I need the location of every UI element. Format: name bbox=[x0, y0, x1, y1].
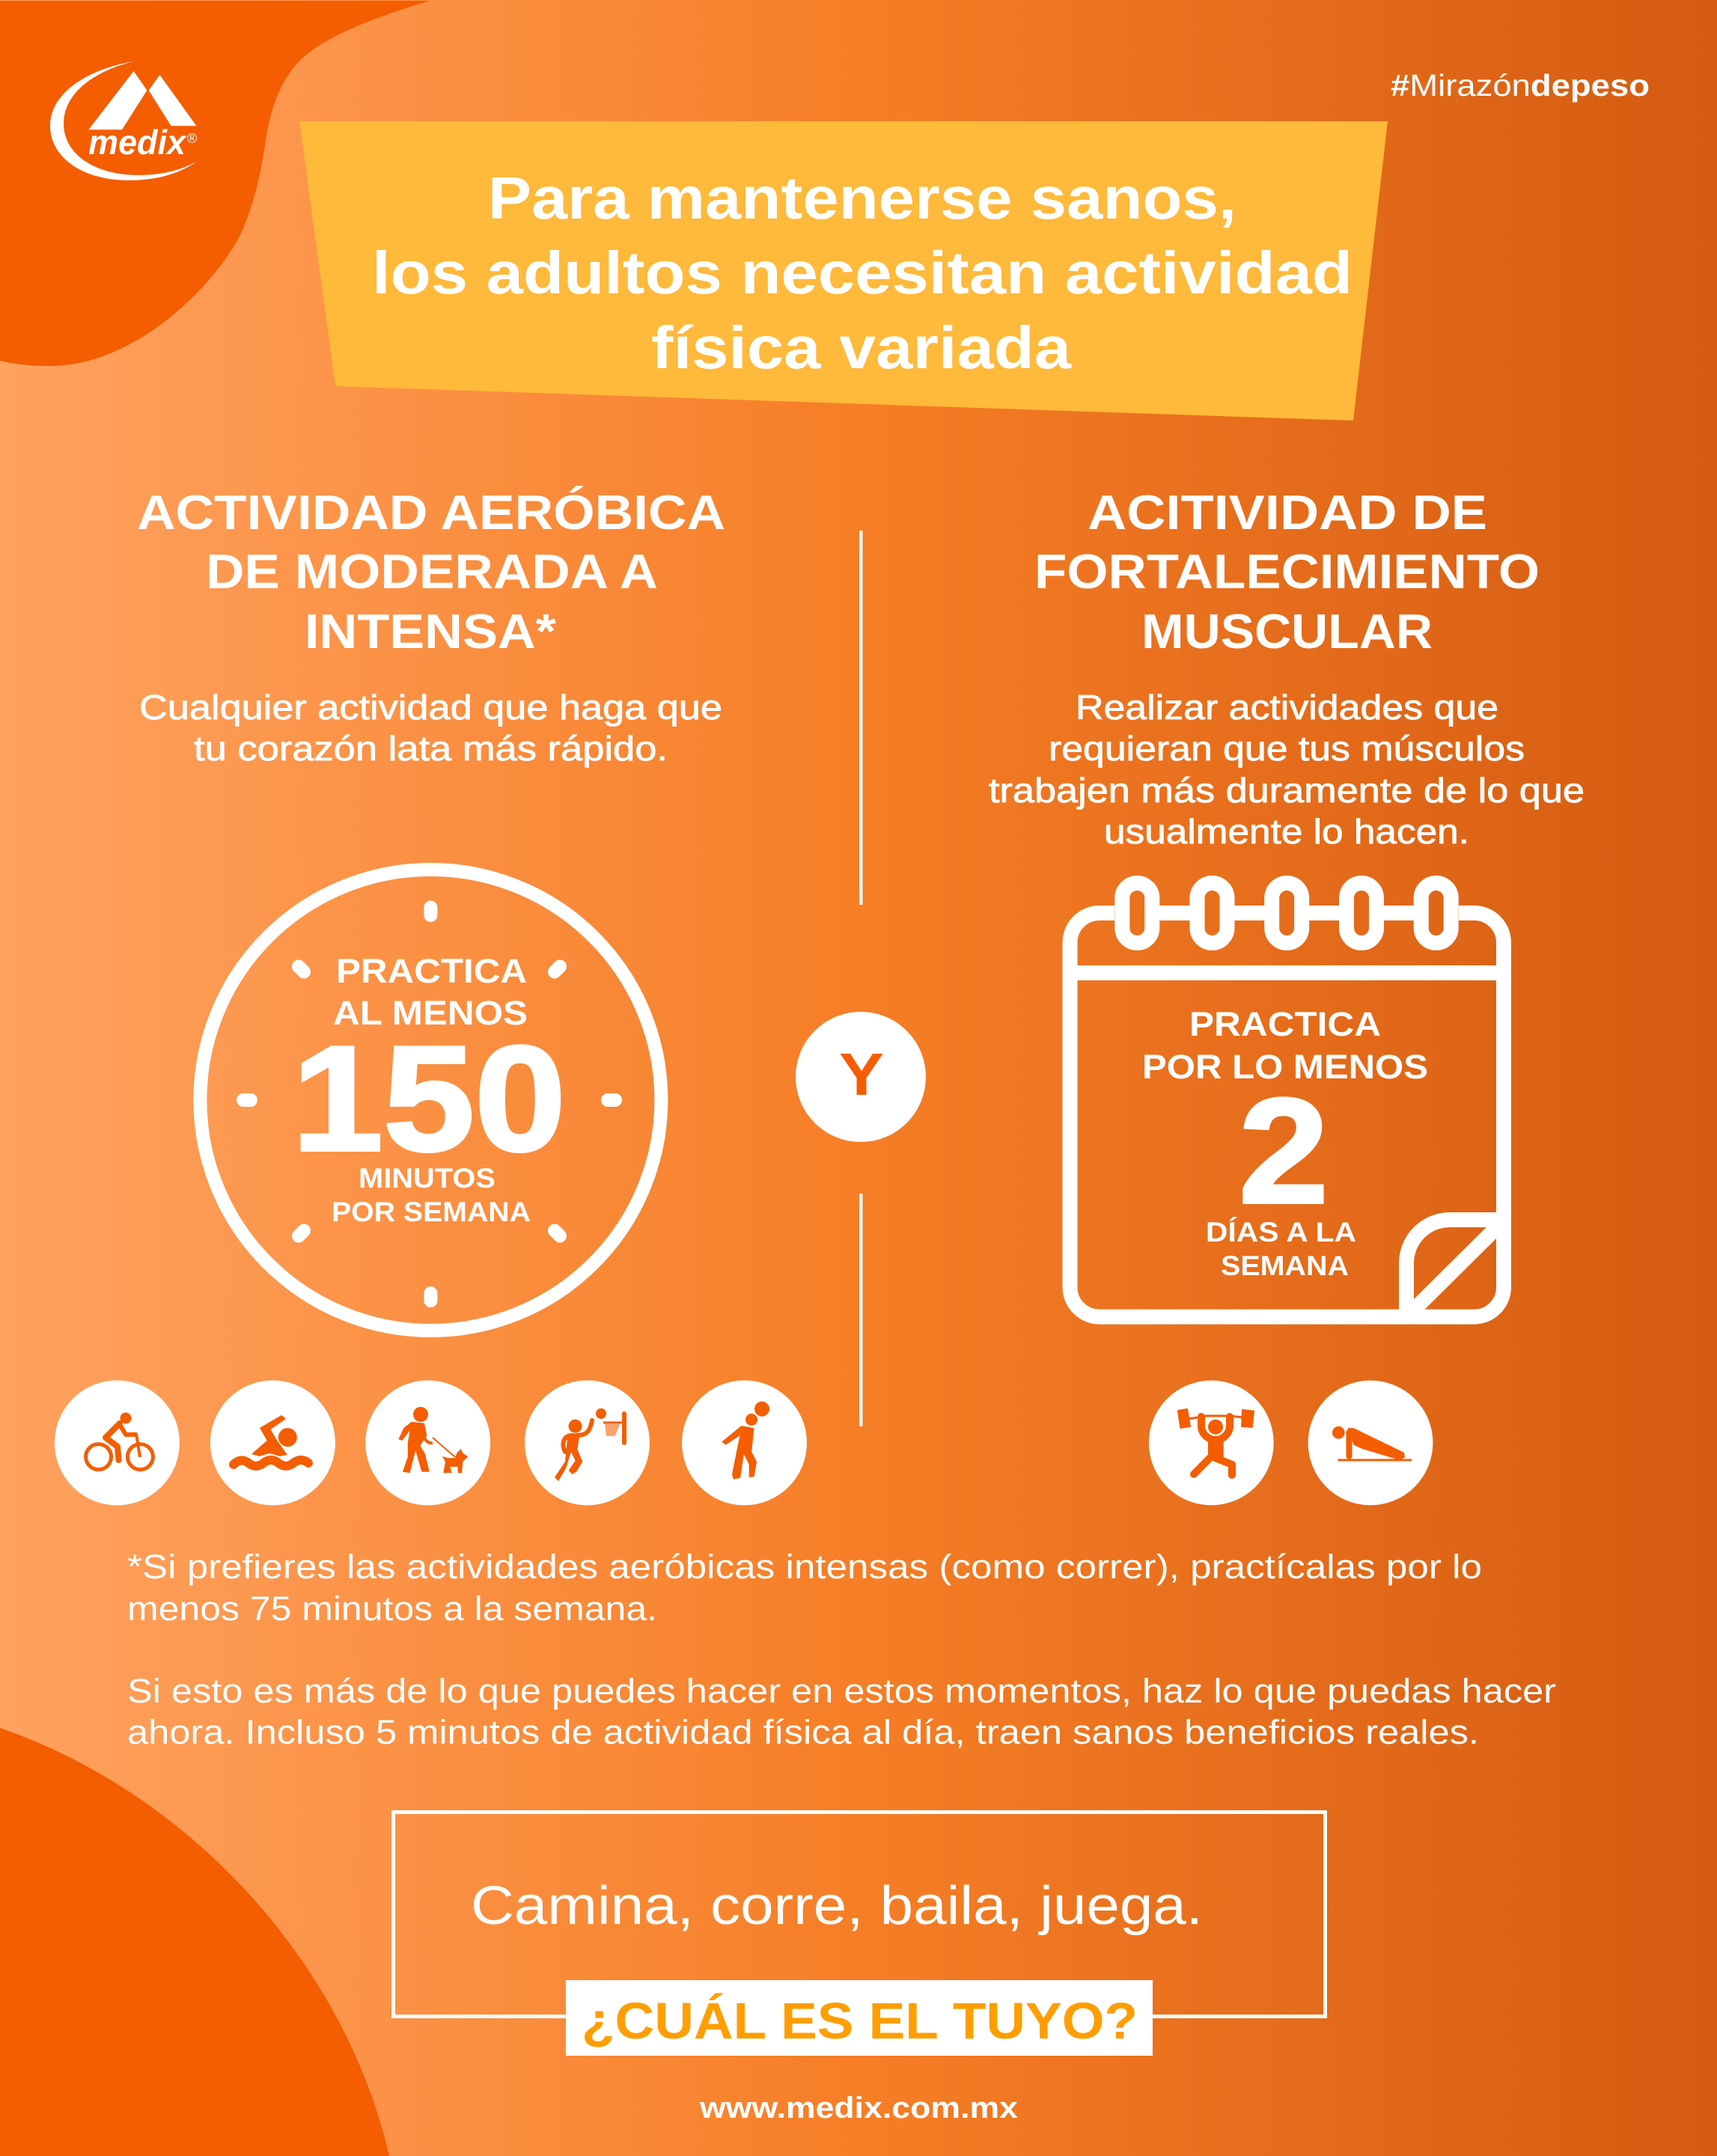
icon: weightlifter bbox=[1149, 1381, 1274, 1505]
clock: 150 minutes: PRACTICA bbox=[336, 952, 527, 990]
icon: basketball bbox=[525, 1380, 650, 1506]
clock: 150 minutes: MINUTOS bbox=[359, 1163, 495, 1194]
title banner bbox=[299, 121, 1388, 421]
hashtag: #Mirazón depeso bbox=[1391, 68, 1650, 103]
calendar: 2 days: 2 bbox=[1239, 1068, 1329, 1235]
icon: volleyball player bbox=[682, 1380, 807, 1506]
calendar: 2 days: PRACTICA bbox=[1189, 1005, 1381, 1043]
icon: walking the dog bbox=[365, 1380, 490, 1506]
footnote text: menos 75 minutos a la semana. bbox=[127, 1589, 657, 1628]
footnote text bbox=[127, 1548, 1556, 1751]
panel: aerobic heading: INTENSA* bbox=[305, 604, 557, 659]
muscle description: Realizar actividades que bbox=[1076, 688, 1498, 727]
calendar: 2 days bbox=[1063, 883, 1511, 1317]
aerobic description bbox=[139, 688, 722, 768]
panel: muscle heading: ACITIVIDAD DE bbox=[1088, 485, 1487, 540]
logo: medix: medix bbox=[88, 123, 187, 162]
callout tag: ¿CUÁL ES EL TUYO? bbox=[582, 1992, 1138, 2050]
title text: física variada bbox=[651, 314, 1072, 381]
clock: 150 minutes: POR SEMANA bbox=[332, 1197, 531, 1227]
website: www.medix.com.mx bbox=[699, 2092, 1018, 2125]
panel: muscle heading: FORTALECIMIENTO bbox=[1034, 544, 1540, 599]
aerobic description: tu corazón lata más rápido. bbox=[194, 729, 668, 768]
clock: 150 minutes: 150 bbox=[292, 1016, 566, 1182]
callout text: Camina, corre, baila, juega. bbox=[471, 1876, 1203, 1936]
callout tag bbox=[566, 1980, 1153, 2056]
logo: medix bbox=[50, 61, 197, 180]
title text bbox=[372, 165, 1352, 381]
icon: swimmer bbox=[210, 1380, 335, 1506]
connector: Y badge bbox=[796, 1012, 926, 1142]
muscle description bbox=[989, 688, 1585, 851]
logo: medix: ® bbox=[187, 131, 197, 146]
panel: muscle heading bbox=[1034, 485, 1540, 659]
title text: los adultos necesitan actividad bbox=[372, 239, 1352, 306]
bottom-left orange blob bbox=[0, 1728, 389, 2156]
calendar: 2 days: POR LO MENOS bbox=[1142, 1048, 1428, 1086]
panel: aerobic heading: DE MODERADA A bbox=[206, 544, 658, 599]
calendar: 2 days: SEMANA bbox=[1221, 1250, 1349, 1281]
muscle description: requieran que tus músculos bbox=[1049, 729, 1525, 768]
footnote text: *Si prefieres las actividades aeróbicas intensas (como correr), practícalas por lo bbox=[127, 1548, 1482, 1586]
muscle description: trabajen más duramente de lo que bbox=[989, 771, 1585, 810]
footnote text: Si esto es más de lo que puedes hacer en estos momentos, haz lo que puedas hacer bbox=[127, 1672, 1556, 1710]
callout box bbox=[394, 1813, 1325, 2056]
connector: Y badge: Y bbox=[839, 1041, 884, 1108]
clock: 150 minutes bbox=[200, 870, 661, 1331]
top-left orange blob bbox=[0, 1, 430, 366]
calendar: 2 days: DÍAS A LA bbox=[1206, 1217, 1356, 1248]
muscle description: usualmente lo hacen. bbox=[1104, 812, 1469, 851]
panel: aerobic heading: ACTIVIDAD AERÓBICA bbox=[137, 485, 725, 540]
panel: muscle heading: MUSCULAR bbox=[1141, 604, 1433, 659]
panel: aerobic heading bbox=[137, 485, 725, 659]
aerobic description: Cualquier actividad que haga que bbox=[139, 688, 722, 727]
icon: push-up bbox=[1308, 1381, 1433, 1505]
title text: Para mantenerse sanos, bbox=[488, 165, 1236, 231]
clock: 150 minutes: AL MENOS bbox=[333, 994, 528, 1032]
footnote text: ahora. Incluso 5 minutos de actividad física al día, traen sanos beneficios reales. bbox=[127, 1713, 1479, 1751]
icon: cyclist bbox=[55, 1380, 180, 1506]
